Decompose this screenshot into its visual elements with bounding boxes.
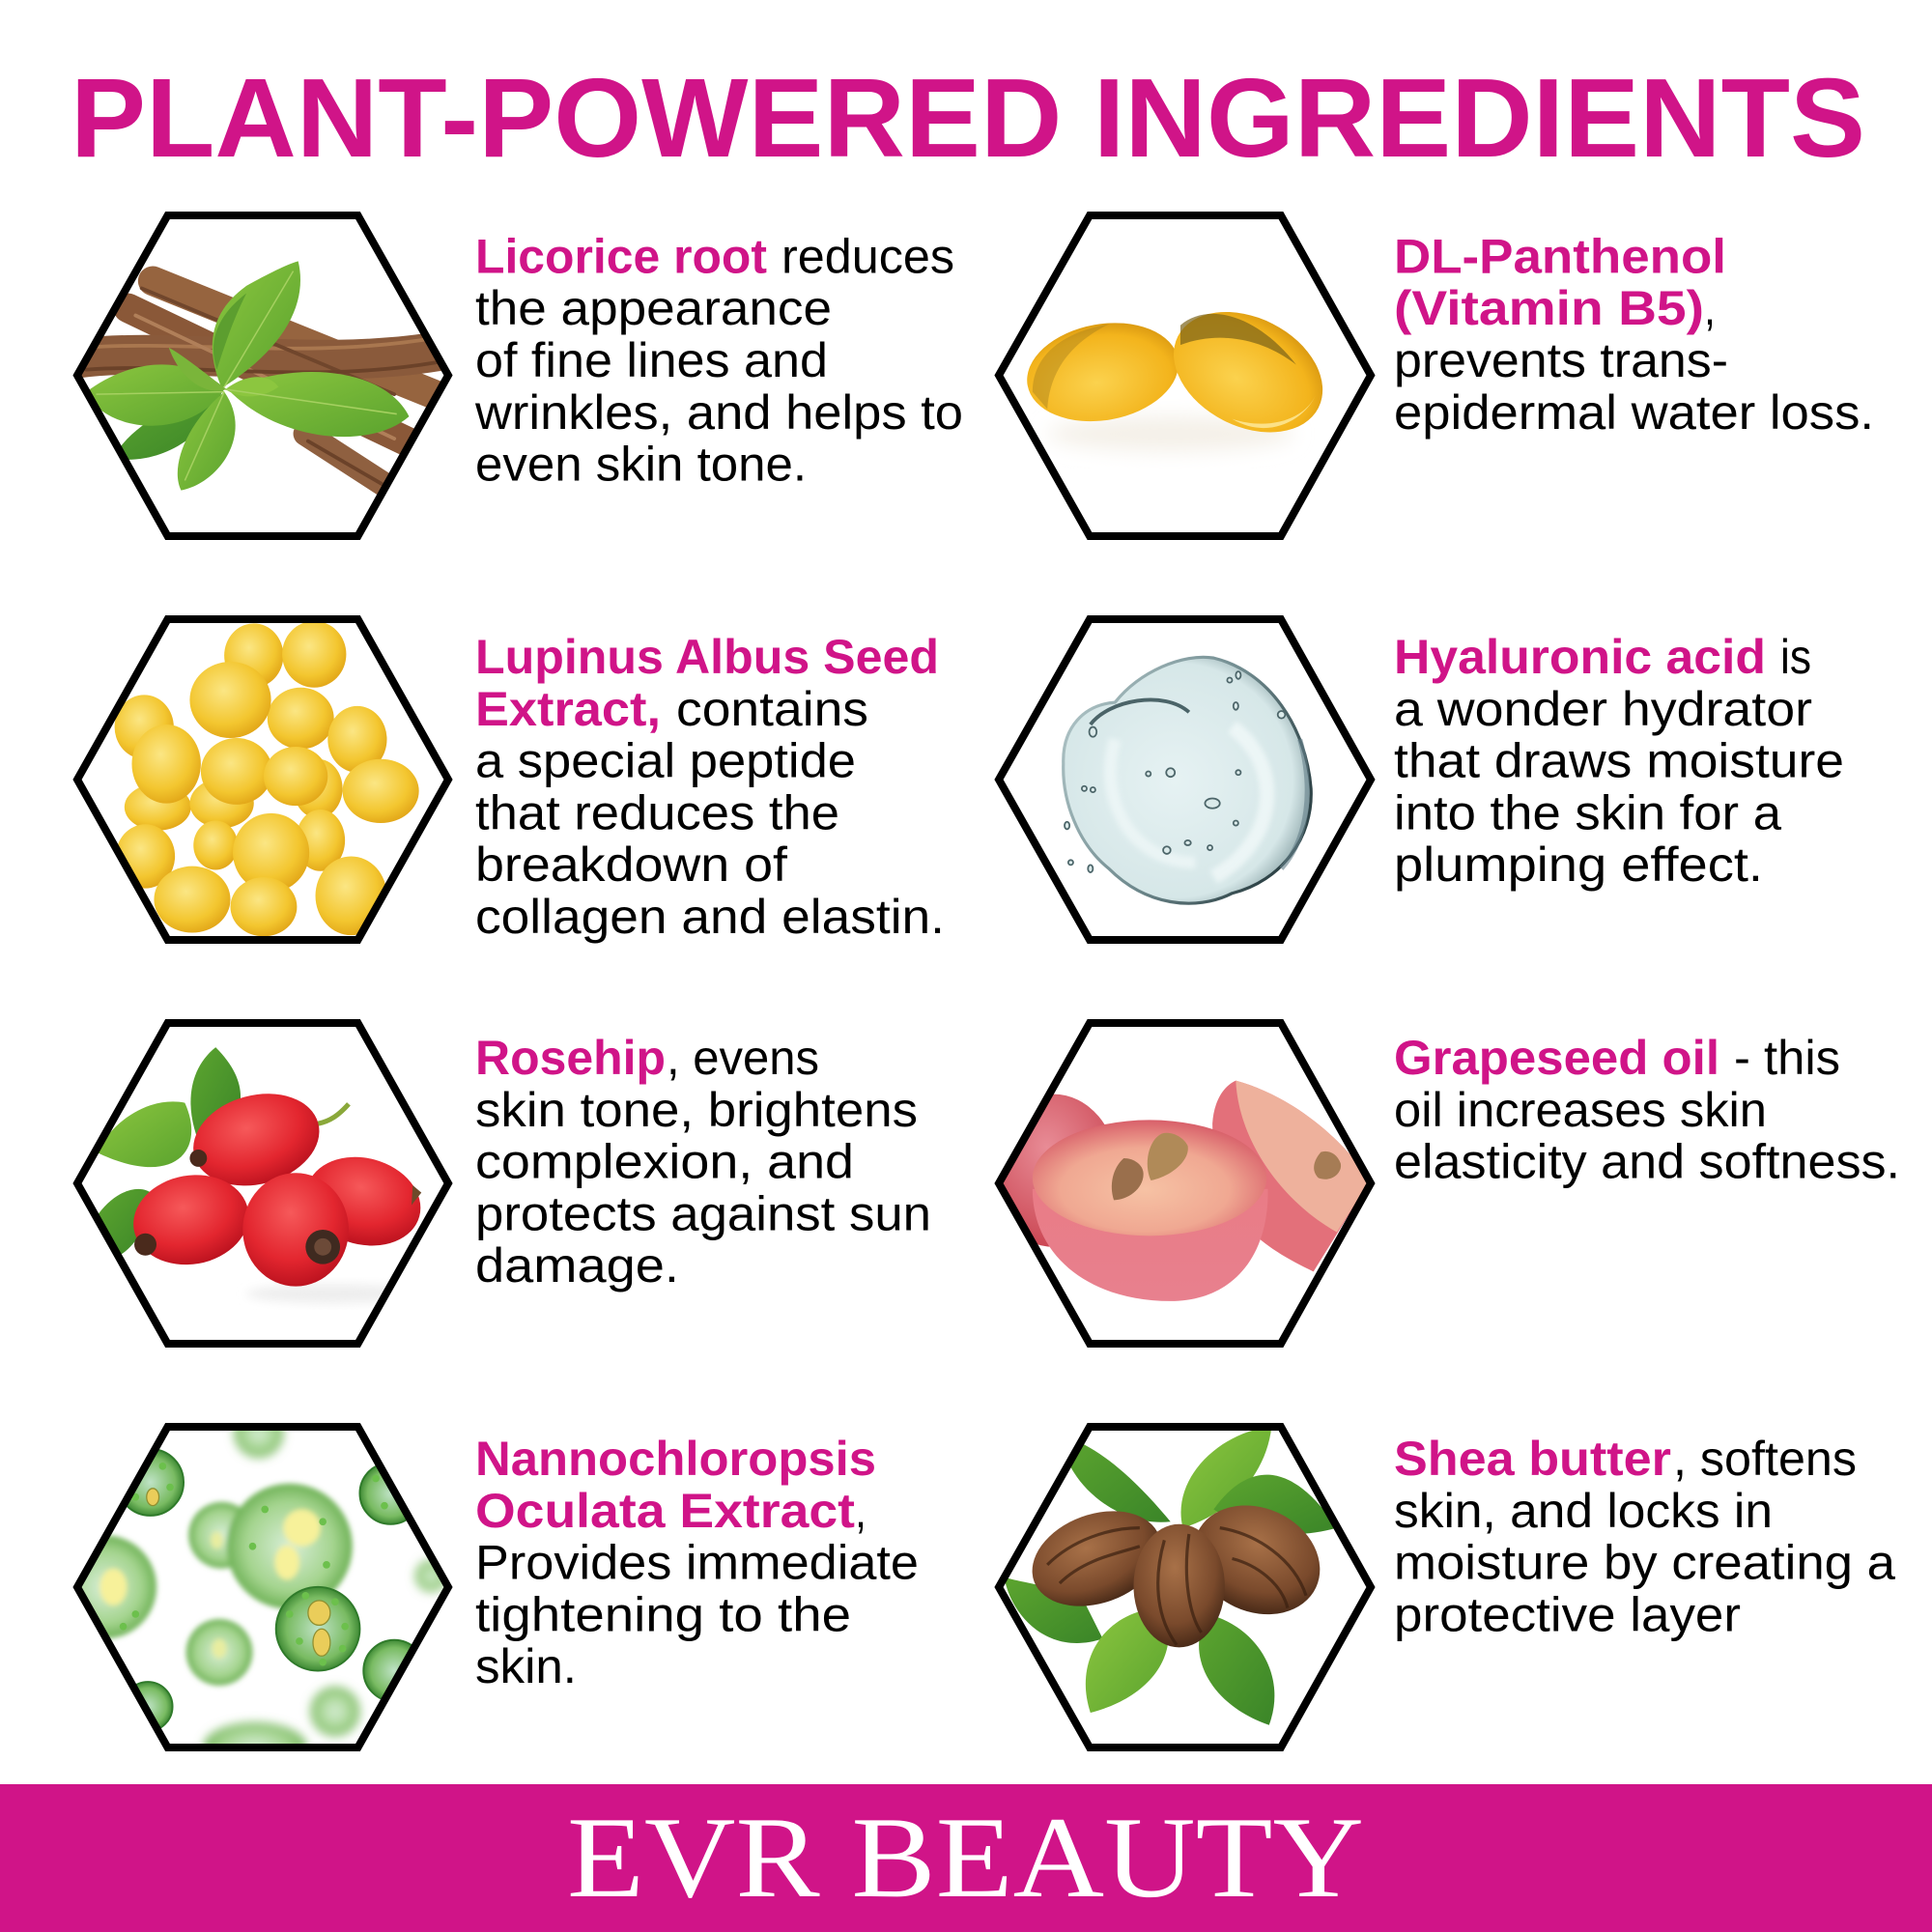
text: lupinus albus: collagen and elastin. [475,890,945,944]
hexagon frame [999,215,1371,536]
hexagon frame [999,619,1371,940]
hexagon frame [999,1023,1371,1344]
text: hyaluronic acid [1394,630,1844,892]
text: hyaluronic acid: that draws moisture [1394,734,1844,788]
hexagon frame [77,1427,448,1747]
text: hyaluronic acid: into the skin for a [1394,785,1781,839]
text: nannochloropsis: Nannochloropsis [475,1432,876,1486]
image: rosehips and leaves [96,1047,431,1303]
text: rosehip [475,1031,931,1293]
image: cut red grapes [989,1081,1370,1301]
text: dl-panthenol: , [1704,281,1716,335]
text: rosehip: skin tone, brightens [475,1083,918,1137]
hexagon frame [77,215,448,536]
panel: lupinus albus [77,619,945,944]
hexagon frame [77,619,448,940]
image: golden oil capsules [1027,312,1323,454]
text: shea butter [1394,1432,1895,1641]
text: licorice root: wrinkles, and helps to [474,385,963,440]
text: lupinus albus: breakdown of [475,838,787,892]
text: licorice root: even skin tone. [475,438,807,492]
text: lupinus albus: a special peptide [475,734,856,788]
panel: grapeseed oil [989,1023,1900,1344]
panel: licorice root [62,197,963,554]
text: lupinus albus [475,630,945,944]
image: gel droplet [1064,657,1311,903]
text: hyaluronic acid: Hyaluronic acid [1394,630,1766,684]
text: dl-panthenol: epidermal water loss. [1394,385,1874,440]
text: licorice root: reduces [781,229,954,283]
text: nannochloropsis: , [855,1484,867,1538]
text: shea butter: Shea butter [1394,1432,1671,1486]
text: lupinus albus: that reduces the [475,785,839,839]
text: dl-panthenol: DL-Panthenol [1394,229,1726,283]
panel: shea butter [999,1427,1895,1747]
text: grapeseed oil: - this [1734,1031,1840,1085]
text: shea butter: skin, and locks in [1394,1484,1773,1538]
image: green algae cells [81,1431,444,1744]
text: licorice root: the appearance [475,281,832,335]
text: rosehip: Rosehip [475,1031,666,1085]
hexagon frame [77,1023,448,1344]
text: hyaluronic acid: plumping effect. [1394,838,1763,892]
text: lupinus albus: Lupinus Albus Seed [475,630,939,684]
text: rosehip: complexion, and [475,1135,854,1189]
text: licorice root: of fine lines and [475,333,828,387]
text: grapeseed oil: oil increases skin [1394,1083,1767,1137]
text: grapeseed oil [1394,1031,1900,1189]
text: dl-panthenol: (Vitamin B5) [1394,281,1704,335]
image: lupin seeds [115,621,419,936]
panel: dl-panthenol [999,215,1874,536]
text: grapeseed oil: Grapeseed oil [1394,1031,1719,1085]
text: nannochloropsis: Provides immediate [475,1536,919,1590]
text: licorice root [474,229,963,492]
text: shea butter: protective layer [1394,1587,1741,1641]
panel: rosehip [77,1023,931,1344]
brand name: EVR BEAUTY [567,1793,1364,1921]
image: licorice root and leaves [81,261,441,495]
text: rosehip: protects against sun [475,1186,931,1240]
text: nannochloropsis [475,1432,919,1693]
text: rosehip: damage. [475,1238,679,1293]
panel: nannochloropsis [73,1423,917,1751]
title: PLANT-POWERED INGREDIENTS [71,55,1865,181]
footer banner [0,1784,1932,1932]
text: hyaluronic acid: a wonder hydrator [1394,682,1812,736]
image: shea nuts and leaves [1005,1427,1338,1725]
text: licorice root: Licorice root [475,229,767,283]
text: lupinus albus: Extract, [475,682,661,736]
text: shea butter: moisture by creating a [1394,1536,1895,1590]
text: nannochloropsis: Oculata Extract [475,1484,855,1538]
text: dl-panthenol: prevents trans- [1394,333,1728,387]
text: rosehip: , evens [667,1031,819,1085]
text: nannochloropsis: tightening to the [475,1587,851,1641]
panel: hyaluronic acid [999,619,1844,940]
text: dl-panthenol [1394,229,1874,440]
text: grapeseed oil: elasticity and softness. [1394,1135,1900,1189]
text: shea butter: , softens [1673,1432,1857,1486]
text: hyaluronic acid: is [1780,630,1811,684]
text: nannochloropsis: skin. [475,1639,577,1693]
hexagon frame [999,1427,1371,1747]
text: lupinus albus: contains [676,682,868,736]
